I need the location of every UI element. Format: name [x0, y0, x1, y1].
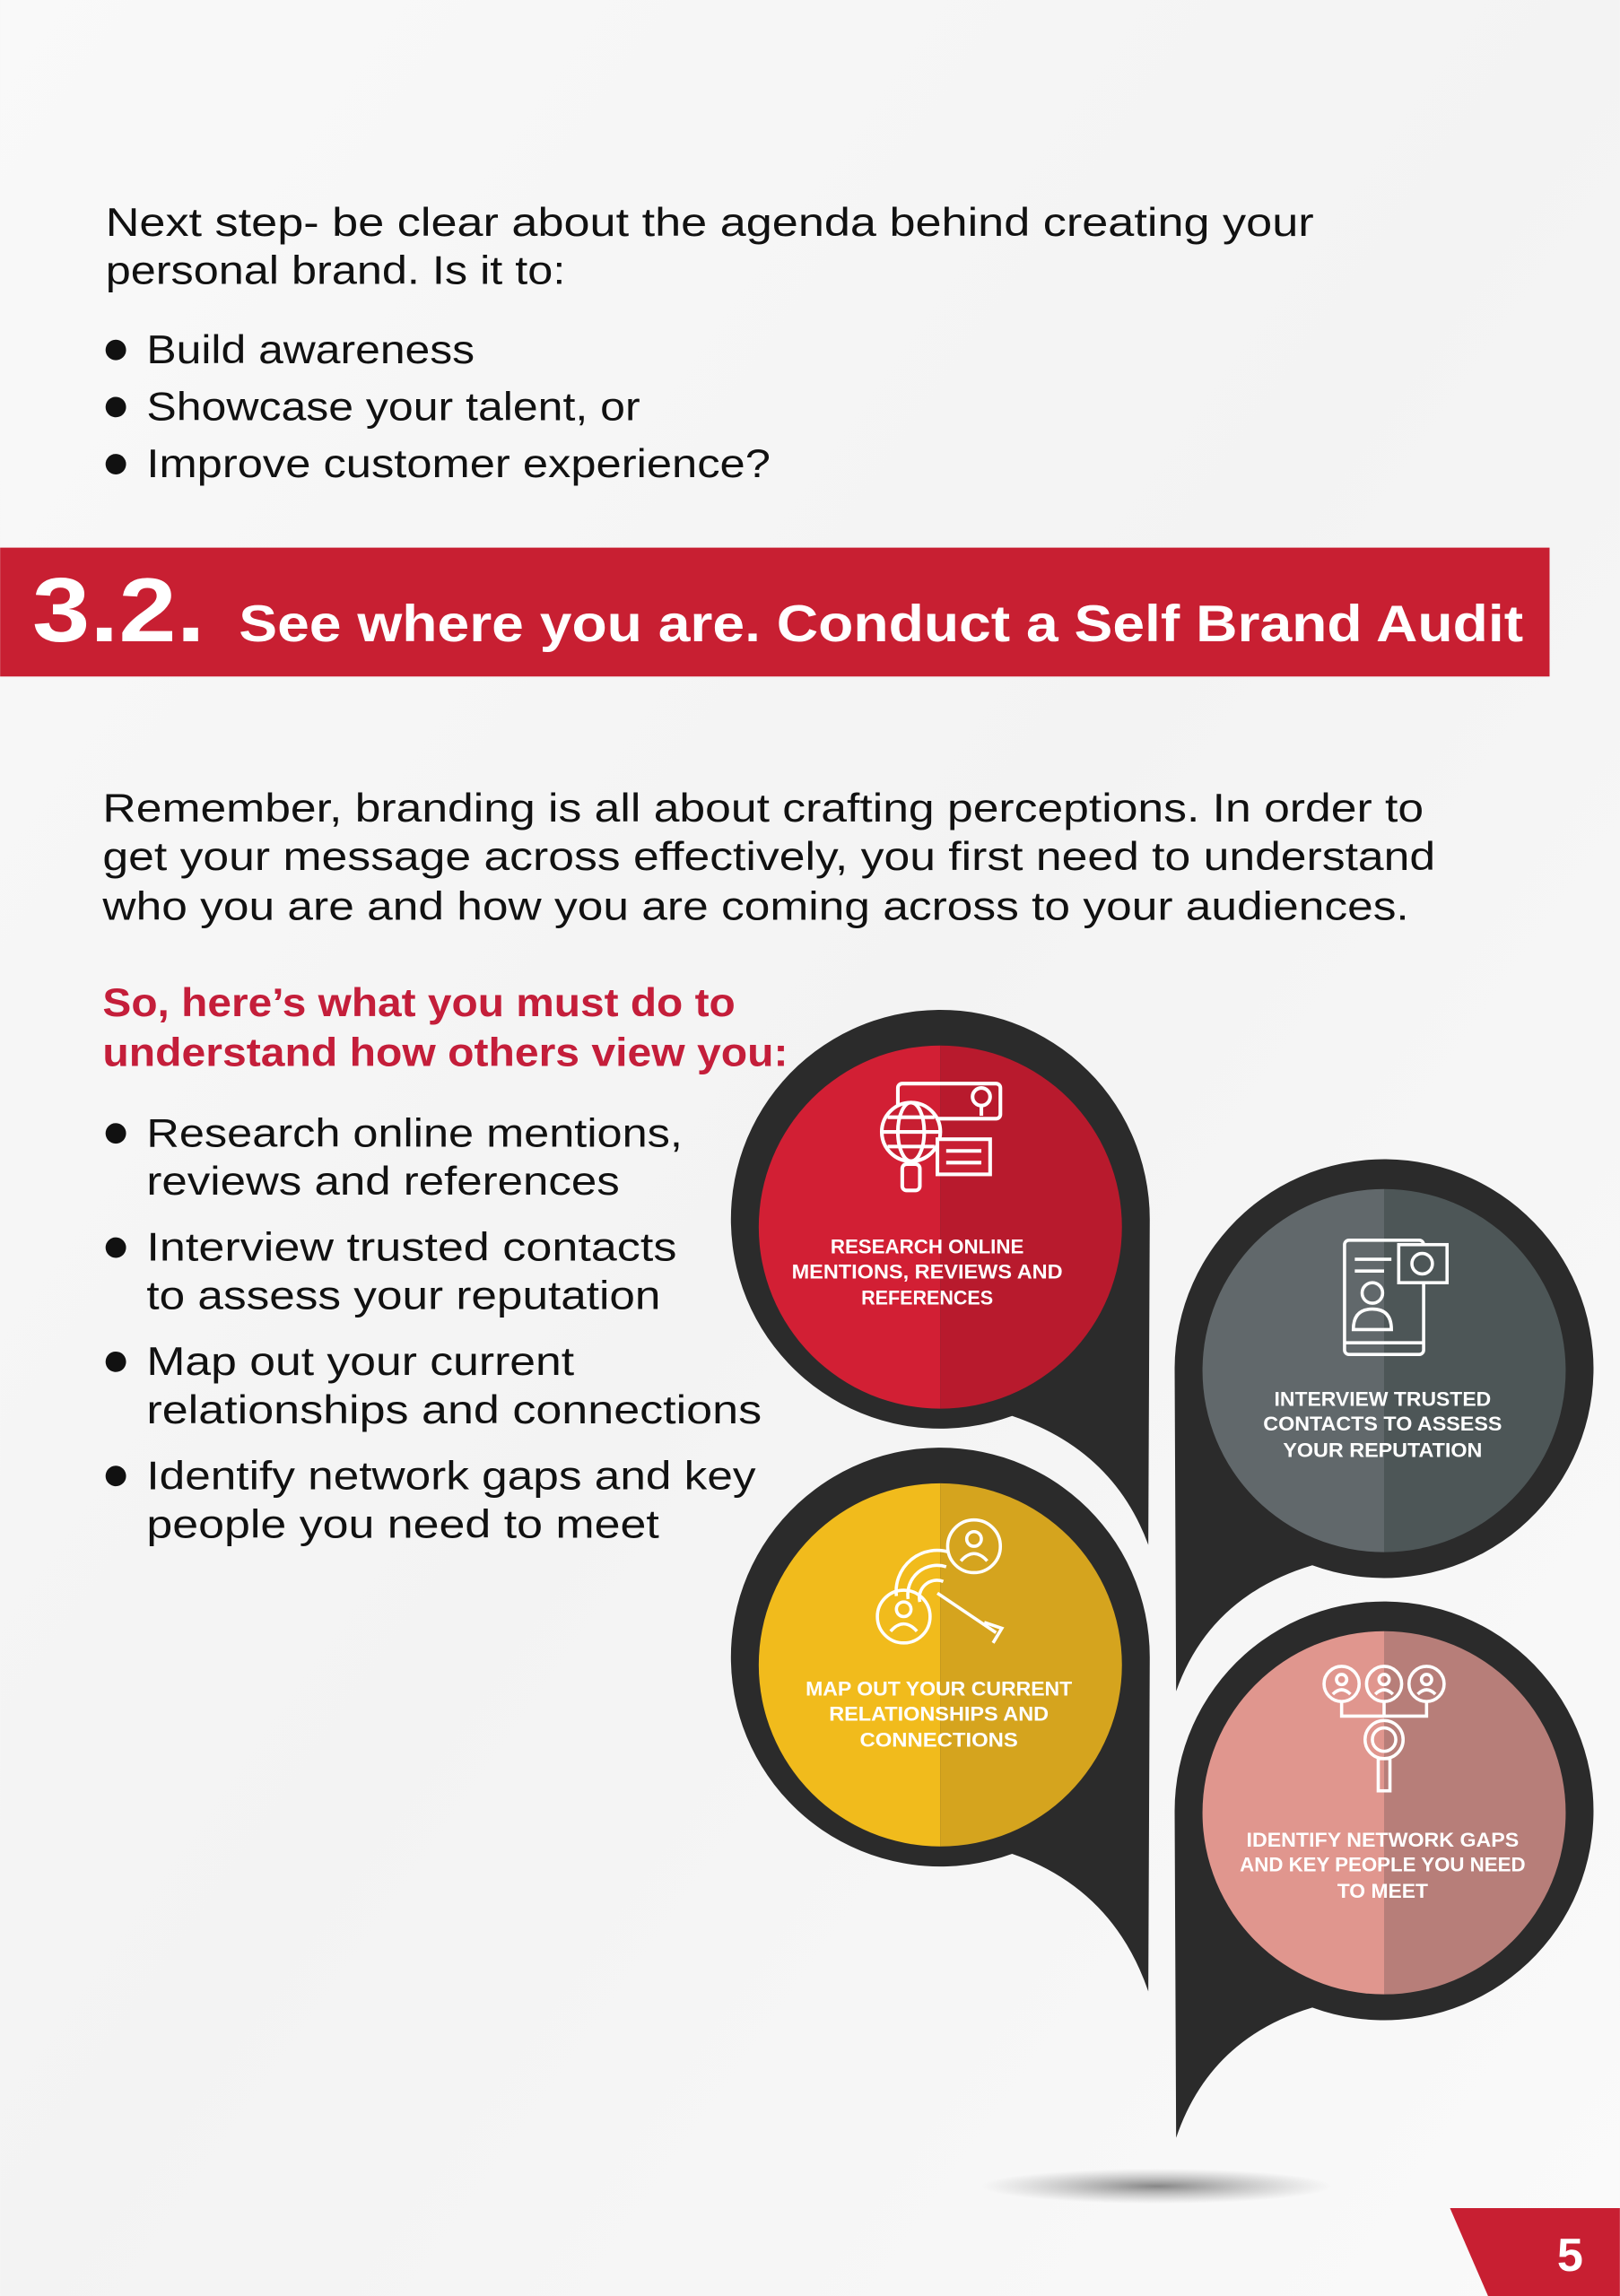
- icon: network target: [877, 1520, 1002, 1643]
- bubble: research: REFERENCES: [861, 1287, 993, 1309]
- shadow: [981, 2169, 1333, 2204]
- icon: interview: [1345, 1240, 1447, 1354]
- icon: people search: [1324, 1666, 1444, 1791]
- bubble: network gaps: IDENTIFY NETWORK GAPS: [1247, 1829, 1519, 1851]
- audit bullets: to assess your reputation: [146, 1274, 660, 1318]
- bubble: network gaps: TO MEET: [1337, 1880, 1429, 1902]
- page number: 5: [1557, 2230, 1583, 2282]
- bubble: interview: CONTACTS TO ASSESS: [1263, 1413, 1502, 1435]
- bubble: map relationships: [731, 1448, 1150, 1991]
- bubble: map relationships: CONNECTIONS: [860, 1729, 1018, 1752]
- intro text: personal brand. Is it to:: [106, 249, 565, 293]
- bubble: map relationships: MAP OUT YOUR CURRENT: [806, 1678, 1073, 1700]
- icon: globe search: [882, 1083, 1000, 1190]
- intro bullets: Showcase your talent, or: [146, 386, 640, 430]
- bubble: research: RESEARCH ONLINE: [831, 1236, 1023, 1258]
- paragraph: [101, 787, 1435, 928]
- section banner: See where you are. Conduct a Self Brand Audit: [239, 596, 1523, 653]
- audit bullets: Identify network gaps and key: [146, 1454, 756, 1498]
- intro text: Next step- be clear about the agenda behind creating your: [106, 201, 1314, 245]
- audit bullets: relationships and connections: [146, 1388, 762, 1432]
- intro bullets: Improve customer experience?: [146, 442, 771, 486]
- audit bullets: Interview trusted contacts: [146, 1226, 676, 1270]
- bubble: research: MENTIONS, REVIEWS AND: [792, 1260, 1063, 1283]
- section banner: 3.2.: [32, 560, 205, 661]
- red subheading: understand how others view you:: [102, 1031, 788, 1075]
- audit bullets: reviews and references: [146, 1160, 620, 1204]
- section banner: [0, 548, 1549, 676]
- bubble: interview: INTERVIEW TRUSTED: [1275, 1387, 1491, 1410]
- bubble: network gaps: AND KEY PEOPLE YOU NEED: [1240, 1854, 1526, 1876]
- bubble: research: [731, 1010, 1150, 1544]
- audit bullets: [106, 1111, 762, 1546]
- paragraph: get your message across effectively, you first need to understand: [102, 835, 1435, 879]
- intro text: [106, 201, 1314, 293]
- paragraph: who you are and how you are coming across to your audiences.: [101, 884, 1409, 928]
- page number: [1450, 2208, 1620, 2296]
- audit bullets: Map out your current: [146, 1340, 574, 1384]
- red subheading: So, here’s what you must do to: [102, 981, 736, 1025]
- paragraph: Remember, branding is all about crafting perceptions. In order to: [102, 787, 1424, 831]
- intro bullets: Build awareness: [146, 328, 475, 372]
- intro bullets: [106, 328, 771, 486]
- bubble: network gaps: [1171, 1602, 1597, 2138]
- red subheading: [102, 981, 788, 1075]
- bubble: map relationships: RELATIONSHIPS AND: [829, 1702, 1049, 1725]
- audit bullets: Research online mentions,: [146, 1111, 683, 1155]
- bubble: interview: [1171, 1160, 1597, 1692]
- audit bullets: people you need to meet: [146, 1502, 659, 1546]
- bubble: interview: YOUR REPUTATION: [1283, 1439, 1482, 1461]
